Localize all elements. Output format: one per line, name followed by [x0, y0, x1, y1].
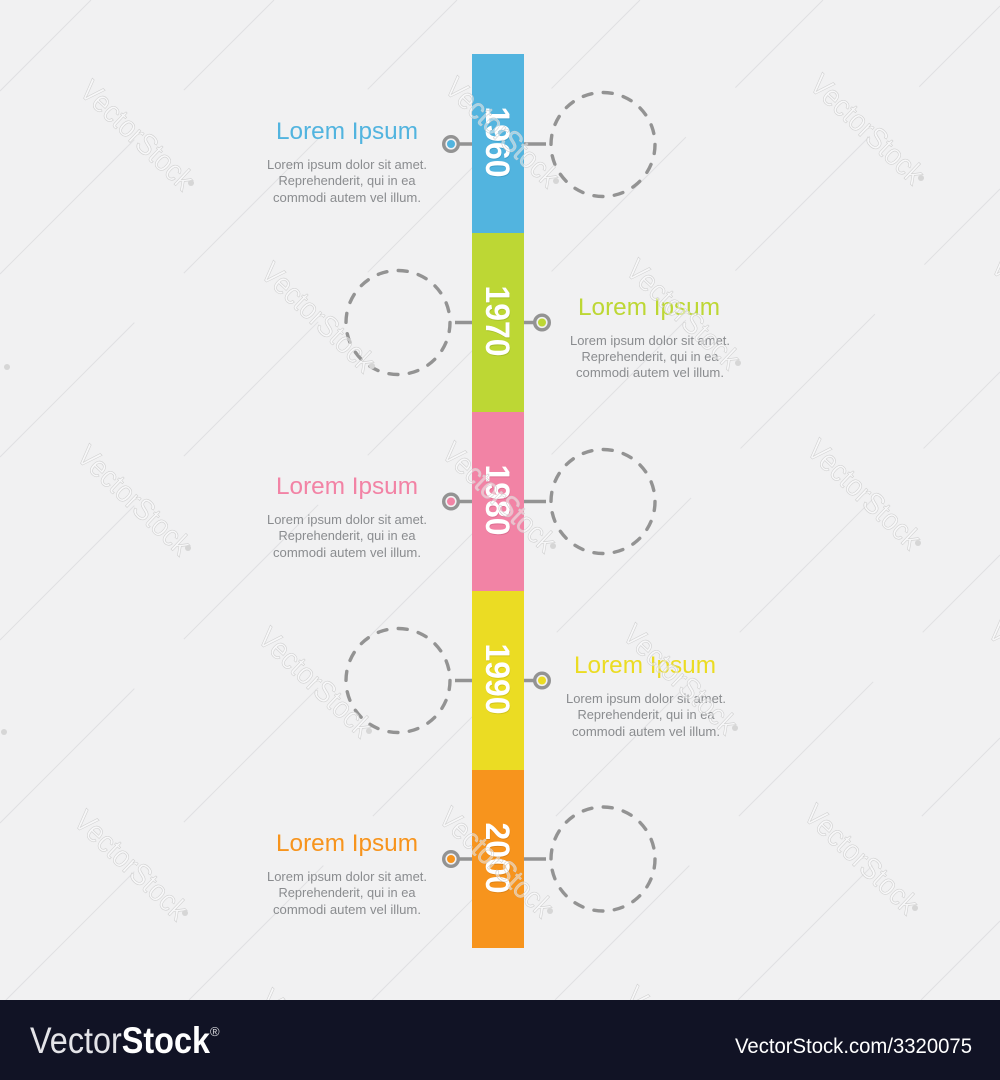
watermarks: VectorStock [432, 801, 560, 925]
icon placeholder: dashed circle [346, 628, 450, 732]
icon placeholder: dashed circle [551, 450, 655, 554]
watermarks: VectorStock [254, 256, 382, 380]
watermarks: VectorStock [438, 71, 566, 195]
watermarks: VectorStock [435, 436, 563, 560]
footer image id: VectorStock.com/3320075 [735, 1035, 972, 1058]
description [267, 157, 427, 205]
icon placeholder: dashed circle [346, 270, 450, 374]
description: Reprehenderit, qui in ea [582, 349, 719, 364]
description: Lorem ipsum dolor sit amet. [570, 333, 730, 348]
description [267, 512, 427, 560]
year 2000: 2000 [478, 822, 516, 894]
description: Reprehenderit, qui in ea [278, 528, 416, 543]
timeline bar [472, 54, 524, 948]
year 1980: 1980 [478, 466, 516, 536]
connector [455, 679, 472, 682]
description: Reprehenderit, qui in ea [578, 707, 715, 722]
description [267, 869, 427, 917]
event 1980 [267, 450, 655, 560]
event 1970 [346, 270, 730, 380]
watermarks: VectorStock [800, 433, 928, 557]
year 1960: 1960 [478, 108, 516, 178]
description [570, 333, 730, 380]
segment: 1980 [472, 412, 524, 591]
segment: 1990 [472, 591, 524, 770]
segment: 1970 [472, 233, 524, 412]
pin [444, 852, 472, 866]
icon placeholder: dashed circle [551, 807, 655, 911]
heading: Lorem Ipsum [574, 652, 716, 679]
watermarks: VectorStock [619, 253, 747, 377]
icon placeholder: dashed circle [551, 92, 655, 196]
description: Reprehenderit, qui in ea [278, 173, 416, 188]
pin [524, 315, 549, 330]
watermarks: VectorStock [803, 68, 931, 192]
pin [444, 137, 472, 151]
year 1970: 1970 [478, 286, 516, 358]
heading: Lorem Ipsum [276, 830, 418, 857]
description: commodi autem vel illum. [572, 724, 720, 739]
description: Lorem ipsum dolor sit amet. [267, 869, 427, 884]
description: commodi autem vel illum. [273, 902, 421, 917]
event 2000 [267, 807, 655, 917]
watermarks: VectorStock [73, 74, 201, 198]
description: commodi autem vel illum. [273, 545, 421, 560]
description: Lorem ipsum dolor sit amet. [566, 691, 726, 706]
pin [444, 494, 472, 509]
heading: Lorem Ipsum [276, 473, 418, 500]
footer bar [0, 1000, 1000, 1080]
footer logo: ® [210, 1024, 220, 1039]
footer logo: VectorStock [30, 1020, 210, 1061]
year 1970: 1970 [478, 286, 516, 356]
year 1990: 1990 [478, 644, 516, 714]
description: commodi autem vel illum. [273, 190, 421, 205]
description [566, 691, 726, 739]
description: Lorem ipsum dolor sit amet. [267, 512, 427, 527]
watermarks: VectorStock [67, 804, 195, 928]
year 1960: 1960 [478, 106, 516, 178]
connector [524, 500, 546, 503]
year 1990: 1990 [478, 644, 516, 716]
heading: Lorem Ipsum [578, 294, 720, 321]
connector [524, 857, 546, 861]
pin [524, 673, 549, 688]
segment: 2000 [472, 770, 524, 948]
description: commodi autem vel illum. [576, 365, 724, 380]
watermarks: VectorStock [797, 798, 925, 922]
watermarks: VectorStock [251, 621, 379, 745]
year 1980: 1980 [478, 464, 516, 536]
event 1960 [267, 92, 655, 205]
segment: 1960 [472, 54, 524, 233]
connector [455, 321, 472, 324]
description: Lorem ipsum dolor sit amet. [267, 157, 427, 172]
heading: Lorem Ipsum [276, 118, 418, 145]
event 1990 [346, 628, 726, 739]
year 2000: 2000 [478, 824, 516, 894]
year labels [478, 106, 516, 894]
watermarks: VectorStock [616, 618, 744, 742]
watermarks: VectorStock [70, 439, 198, 563]
connector [524, 142, 546, 146]
description: Reprehenderit, qui in ea [278, 885, 416, 900]
